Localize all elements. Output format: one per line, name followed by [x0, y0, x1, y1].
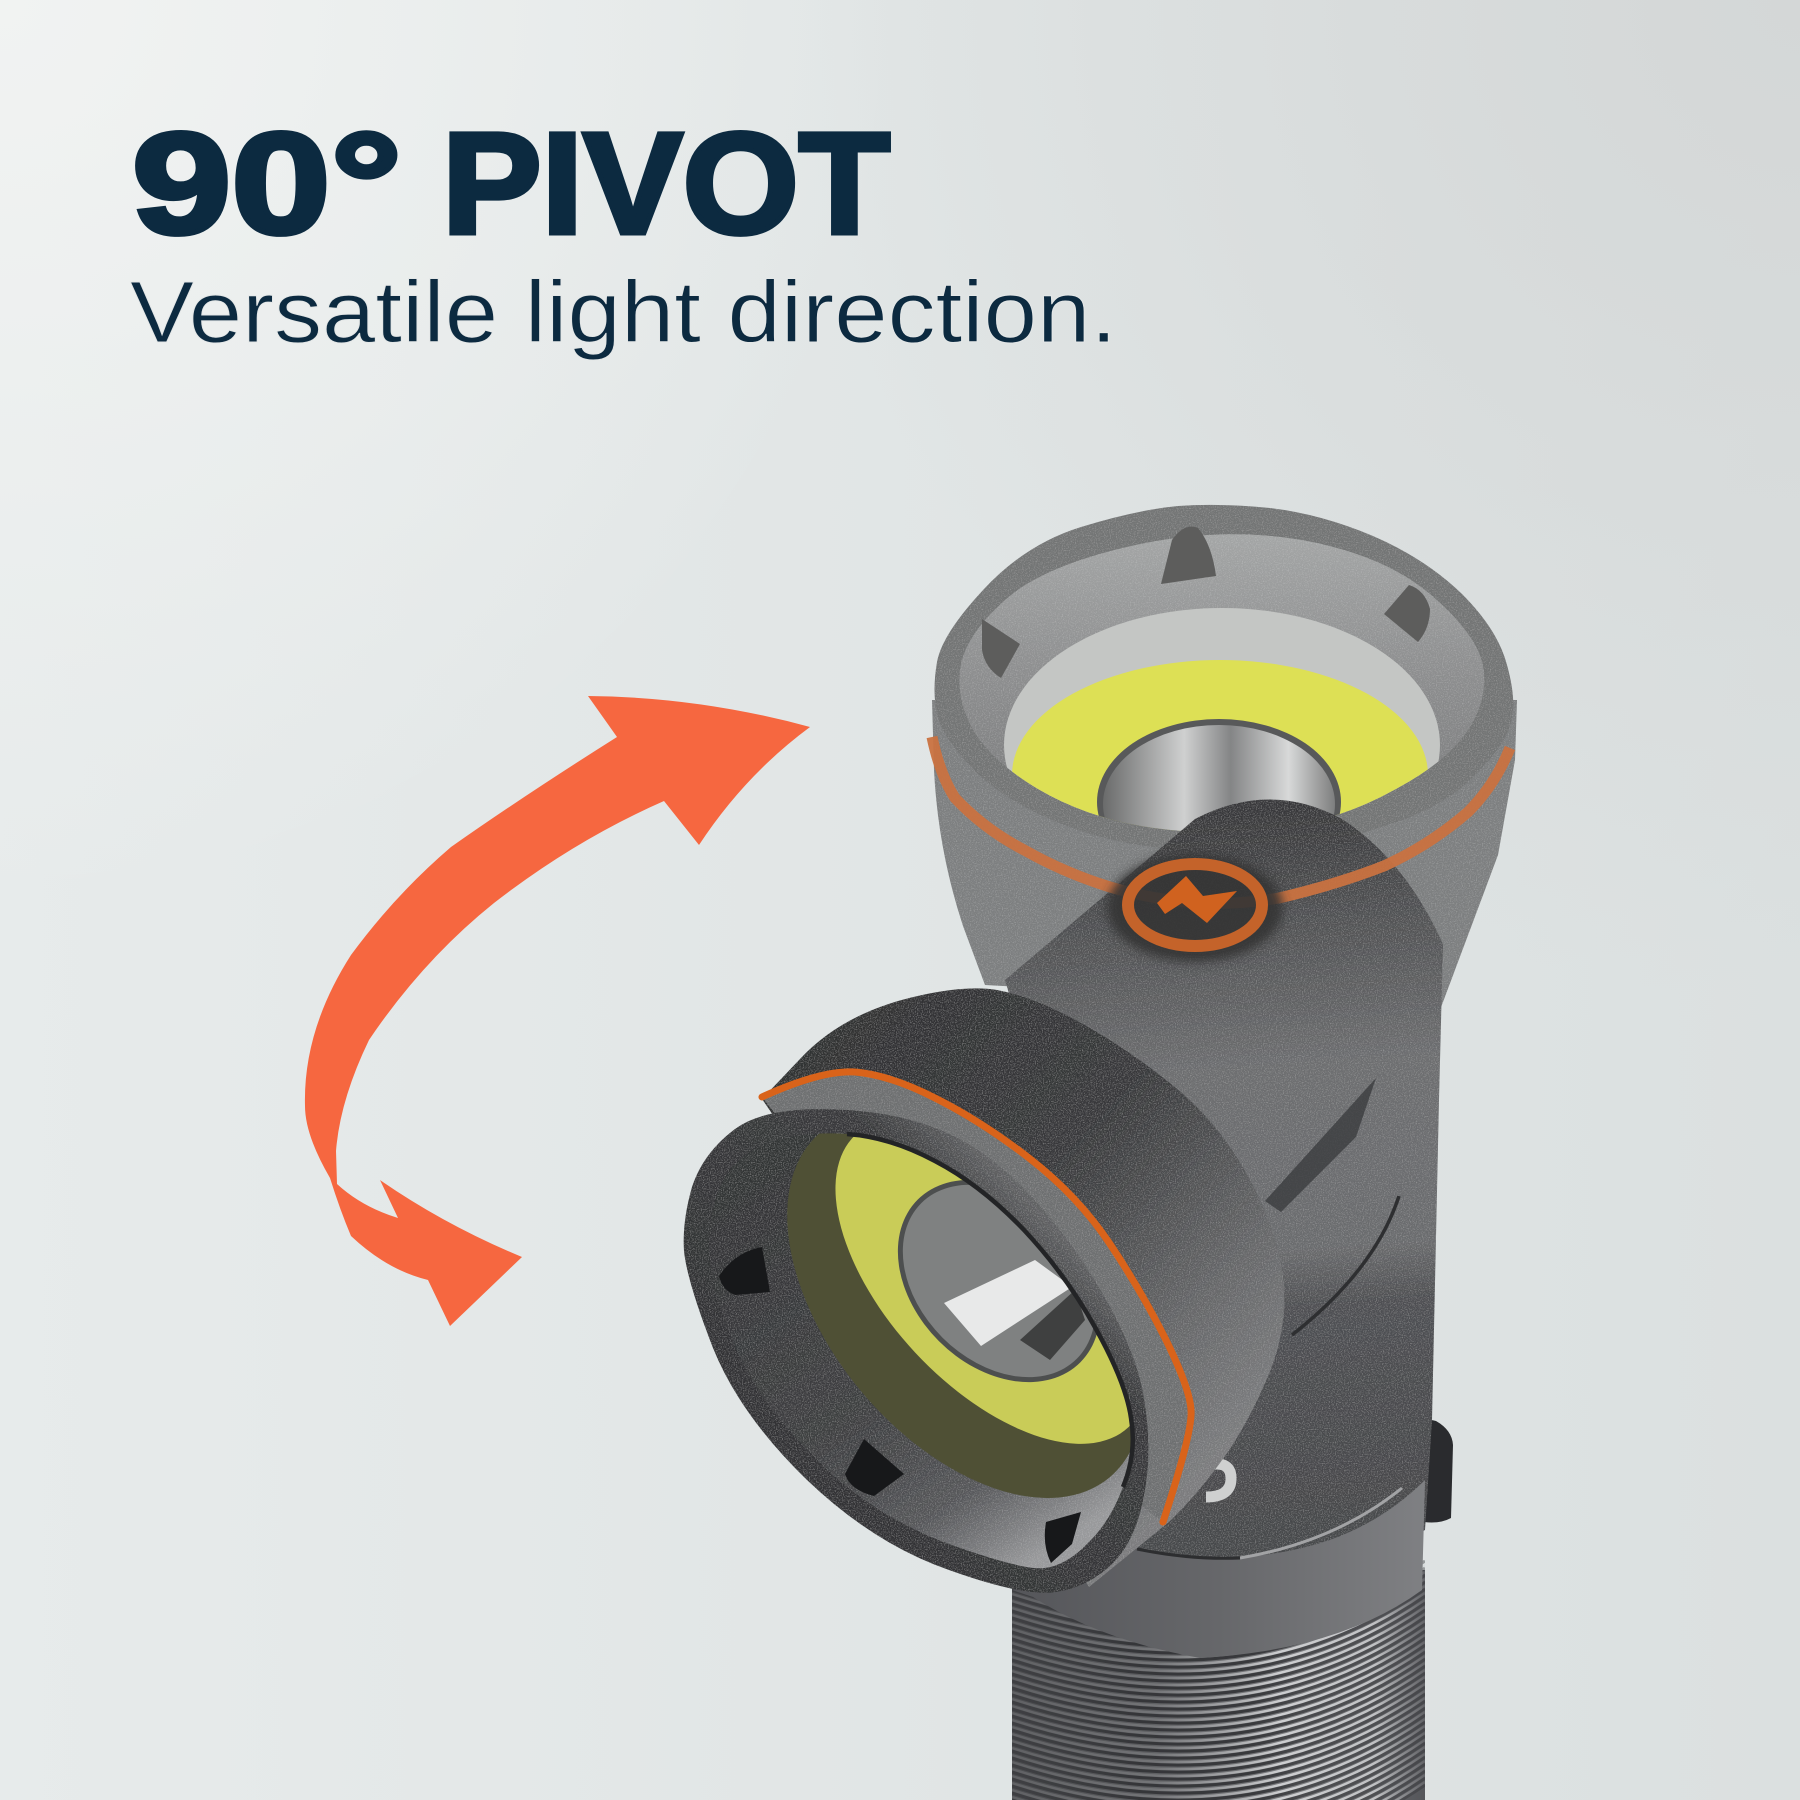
front yellow COB ring [836, 1136, 1130, 1444]
subtitle: Versatile light direction. [130, 264, 1117, 361]
flashlight: logo badge [1107, 854, 1283, 962]
body crease line [1292, 1196, 1399, 1335]
front slots [719, 1247, 1081, 1563]
front head orange ring [762, 1072, 1191, 1522]
title: PIVOT [442, 103, 890, 264]
title [132, 103, 890, 264]
body crease shadow [1265, 1078, 1376, 1212]
ghost rim [934, 505, 1513, 852]
ghost head body [932, 700, 1517, 1010]
title: 90° [132, 103, 402, 264]
flashlight: ghosted upper head position [932, 505, 1517, 1010]
ghost yellow COB ring [1012, 660, 1428, 831]
flashlight: collar [1012, 1480, 1425, 1658]
white mark on body [1206, 1464, 1231, 1497]
ghost slots [982, 526, 1430, 678]
arrow: curved double-headed pivot arrow [305, 696, 810, 1326]
thread highlights [1012, 1571, 1425, 1800]
ghost reflector [1097, 719, 1341, 831]
front head cylinder [762, 988, 1284, 1587]
flashlight: ghost head orange band over tab [932, 737, 1510, 903]
thread grooves [1012, 1540, 1425, 1800]
flashlight: front head [684, 988, 1284, 1593]
flashlight: body and pivot tab [1005, 800, 1443, 1580]
logo ring [1128, 864, 1262, 946]
logo recess [1107, 854, 1283, 962]
flashlight: threaded handle [1012, 1540, 1425, 1800]
front opening edge [847, 1134, 1133, 1487]
ghost lens ring [1004, 608, 1440, 831]
front reflector [898, 1180, 1096, 1382]
ghost lens interior [960, 534, 1484, 831]
logo bolt icon [1157, 876, 1237, 923]
front head rim [684, 1109, 1148, 1593]
front lens ring [787, 1134, 1130, 1498]
front head lip band [762, 1072, 1191, 1522]
front head interior [730, 1134, 1130, 1568]
flashlight: clip on the side [1424, 1420, 1453, 1522]
